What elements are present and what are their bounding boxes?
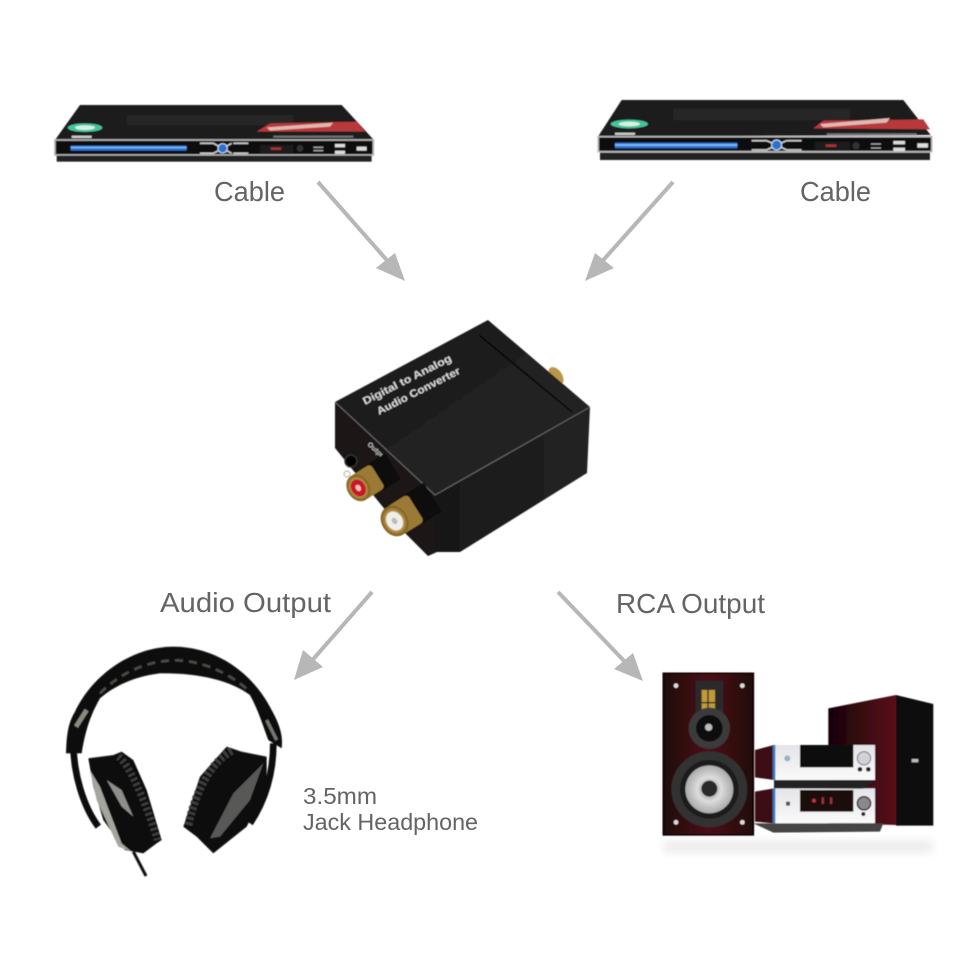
top face: [335, 320, 590, 495]
icon: DVD player right: [598, 100, 932, 160]
reflection: [663, 840, 933, 853]
headband: [66, 647, 282, 753]
arrow: left DVD to converter: [318, 182, 405, 281]
left arm: [73, 743, 98, 827]
label: 3.5mm Jack Headphone: 3.5mm: [303, 783, 377, 809]
left speaker: [663, 673, 753, 835]
icon: headphones: [66, 647, 282, 876]
white RCA jack: [375, 483, 442, 542]
arrow: converter to speakers: [558, 592, 643, 681]
label: Cable left: Cable: [214, 176, 285, 207]
top text: Digital to Analog: [361, 352, 454, 408]
right arm: [250, 743, 273, 823]
right ear cup: [183, 747, 267, 853]
label: RCA Output: RCA Output: [616, 588, 765, 619]
icon: digital to analog converter: Audio Converter: [375, 365, 462, 418]
connector: rear gold jack: [545, 364, 567, 388]
red RCA jack: [341, 454, 401, 506]
stereo units: [755, 745, 774, 780]
icon: DVD player left: [55, 105, 373, 162]
left ear cup: [88, 752, 162, 853]
right face: [435, 407, 590, 552]
headphone socket: [345, 455, 357, 467]
arrow: converter to headphones: [294, 592, 372, 680]
arrow: right DVD to converter: [585, 182, 673, 281]
top edge highlights: [335, 402, 590, 495]
label: Cable right: Cable: [800, 176, 871, 207]
cable: [133, 852, 146, 876]
tweeter: [696, 681, 723, 719]
icon: speakers and stereo system: [663, 673, 933, 853]
left face: [335, 402, 437, 556]
mid driver: [689, 708, 730, 749]
icon: digital to analog converter: Output: [366, 441, 388, 462]
woofer: [671, 751, 747, 827]
icon: digital to analog converter: [335, 320, 590, 556]
subwoofer: [828, 695, 896, 825]
label: 3.5mm Jack Headphone: [303, 783, 478, 835]
label: 3.5mm Jack Headphone: Jack Headphone: [303, 809, 478, 835]
label: Audio Output: Audio Output: [160, 587, 331, 618]
